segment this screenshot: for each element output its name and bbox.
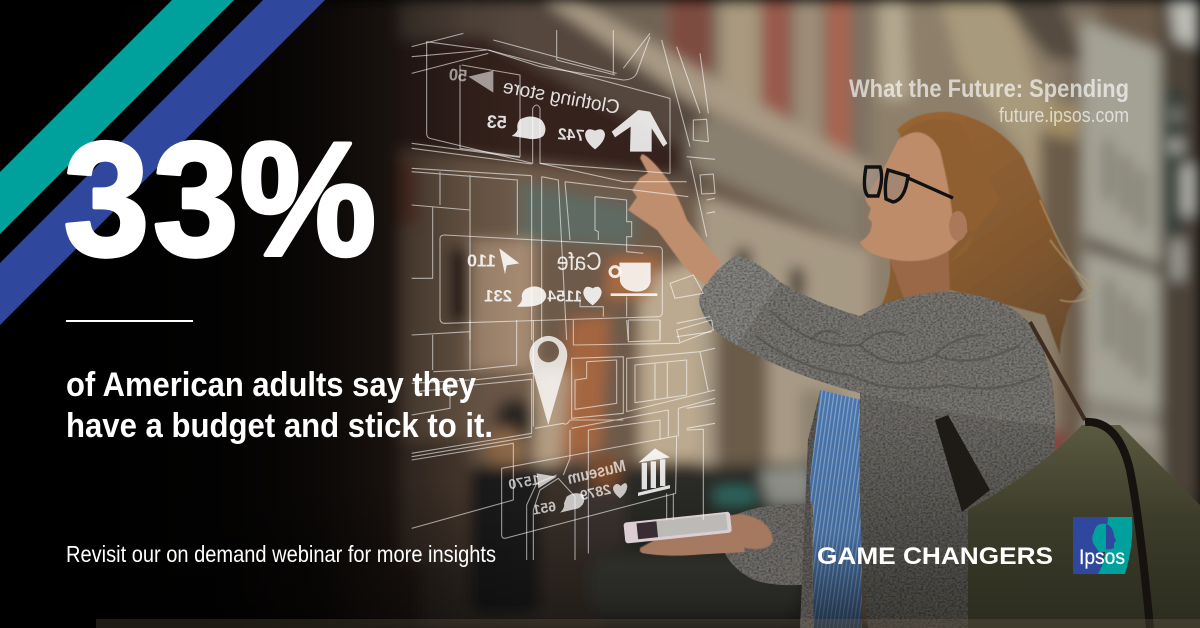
holographic map: lower part: [412, 320, 715, 560]
icon: speech bubble 651: [560, 493, 584, 513]
label: Clothing store: Clothing store: [501, 77, 621, 119]
divider rule: [66, 320, 193, 322]
shoulder strap: [1030, 322, 1085, 420]
graphic: teal diagonal stripe: [0, 0, 234, 234]
neck: [888, 235, 950, 302]
label: 1570: 1570: [507, 471, 541, 492]
glasses: [864, 167, 953, 202]
icon: speech bubble 231: [517, 286, 546, 307]
holographic map: upper part: [412, 30, 715, 340]
face: [860, 130, 967, 261]
hair front: [898, 119, 1000, 262]
label: 651: 651: [531, 498, 557, 518]
icon: shirt: [612, 110, 667, 152]
lower sleeve: [723, 504, 813, 585]
torso sweater: [860, 380, 1055, 628]
study title: What the Future: Spending: [849, 75, 1129, 103]
study url: future.ipsos.com: [999, 105, 1129, 127]
label: 53: 53: [487, 112, 507, 132]
label: Cafe: Cafe: [557, 248, 602, 276]
icon: cursor 110: [499, 248, 519, 274]
background: dark left fade: [0, 0, 520, 628]
bottom strip: [96, 619, 1200, 628]
raised sleeve: [699, 256, 1054, 425]
illustration: woman with raised hand: [623, 112, 1200, 628]
logo blue side: [1073, 517, 1109, 574]
side strap: [935, 415, 990, 512]
statement line 2: have a budget and stick to it.: [66, 407, 493, 445]
icon: speech bubble 53: [512, 116, 545, 139]
icon: arrow 1570: [537, 473, 557, 488]
shirt: [808, 390, 862, 628]
label: 2879: 2879: [578, 481, 612, 503]
lower hand: [640, 514, 773, 556]
Ipsos logo: [1073, 517, 1132, 574]
label: Museum: Museum: [565, 456, 628, 488]
Game Changers wordmark: GAME CHANGERS: [817, 543, 1053, 570]
webinar call to action: Revisit our on demand webinar for more insights: [66, 541, 496, 567]
map lines: [412, 30, 715, 340]
background: dark bottom fade: [0, 480, 1200, 628]
cable knit: [755, 310, 1040, 388]
icon: heart 742: [585, 129, 605, 149]
lower fingers: [642, 535, 745, 555]
logo teal side: [1098, 517, 1132, 574]
left sweater sliver: [800, 392, 820, 628]
statement line 1: of American adults say they: [66, 366, 476, 404]
logo face: [1106, 524, 1116, 549]
label: 742: 742: [557, 126, 585, 145]
bag: [968, 425, 1200, 628]
map lines: [412, 320, 715, 560]
icon: heart 1154: [583, 287, 602, 305]
statement text: [66, 366, 493, 445]
logo head hair: [1092, 524, 1107, 552]
icon: coffee cup: [610, 263, 657, 296]
bag strap: [1085, 422, 1150, 628]
label: 1154: 1154: [547, 289, 582, 306]
icon: heart 2879: [613, 483, 627, 498]
icon: map pin: [529, 336, 567, 425]
label: 50: 50: [448, 65, 468, 86]
cuff: [699, 256, 780, 345]
graphic: blue diagonal stripe: [0, 0, 325, 325]
icon: arrow 50: [468, 71, 493, 93]
raised hand: [628, 154, 722, 285]
logo wordmark: Ipsos: [1079, 546, 1125, 569]
label: 231: 231: [484, 287, 512, 306]
phone: [623, 512, 732, 544]
label: 110: 110: [467, 251, 496, 271]
big number: 33%: [64, 109, 376, 290]
hair back: [880, 112, 1095, 355]
icon: museum: [638, 448, 670, 496]
ear: [949, 211, 967, 241]
